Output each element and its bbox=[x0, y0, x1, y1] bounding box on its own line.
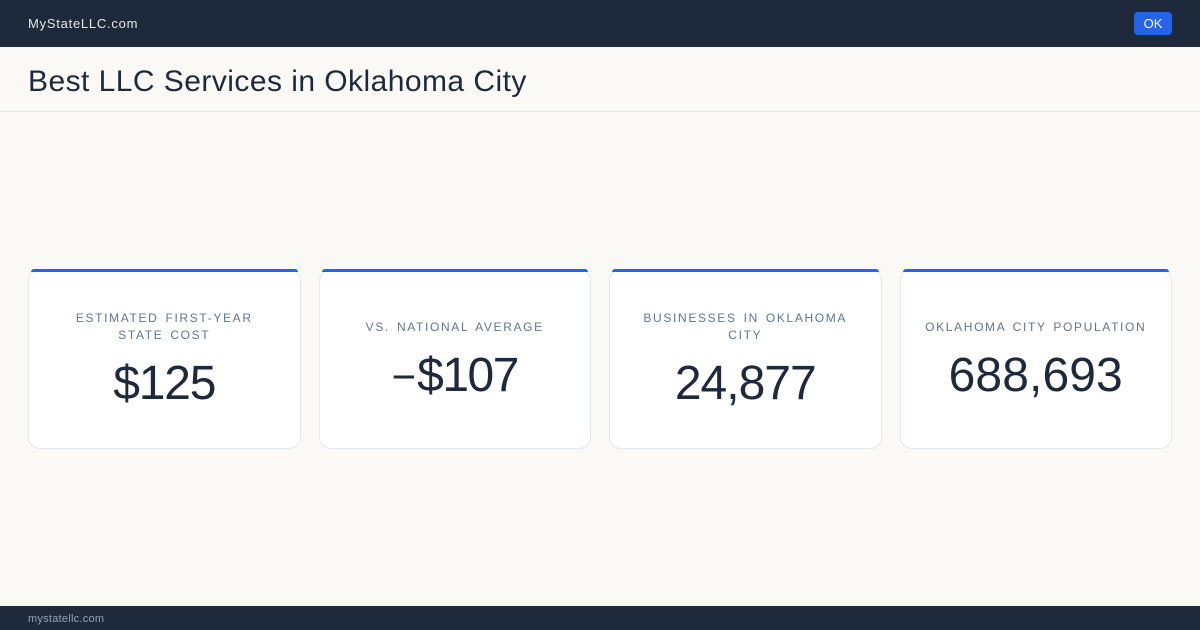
stat card: first-year cost bbox=[28, 269, 300, 449]
value: 688,693 bbox=[949, 349, 1123, 402]
value: −$107 bbox=[392, 349, 518, 402]
label: ESTIMATED FIRST-YEAR STATE COST bbox=[76, 311, 253, 342]
OK button bbox=[1134, 12, 1172, 35]
stat card: businesses bbox=[609, 269, 882, 449]
top bar bbox=[0, 0, 1200, 47]
title bar bbox=[0, 47, 1200, 112]
brand name: MyStateLLC.com bbox=[28, 16, 138, 31]
label: OKLAHOMA CITY POPULATION bbox=[925, 320, 1146, 334]
value: $125 bbox=[113, 357, 215, 410]
stat card: vs national average bbox=[318, 269, 591, 449]
footer bar bbox=[0, 606, 1200, 630]
OK button: OK bbox=[1144, 16, 1162, 31]
stat card: population bbox=[900, 269, 1172, 449]
label: BUSINESSES IN OKLAHOMA CITY bbox=[643, 311, 847, 342]
label: VS. NATIONAL AVERAGE bbox=[366, 320, 544, 334]
footer url: mystatellc.com bbox=[28, 613, 104, 625]
value: 24,877 bbox=[675, 357, 816, 410]
title: Best LLC Services in Oklahoma City bbox=[28, 65, 527, 98]
